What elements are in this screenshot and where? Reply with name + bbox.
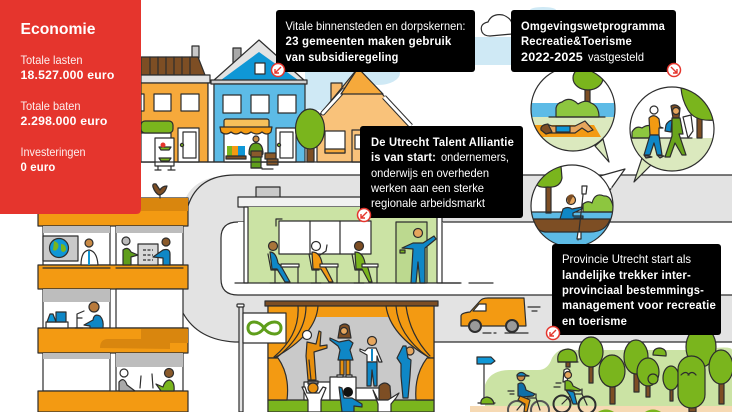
- stat: totale baten: Totale baten: [20, 99, 80, 113]
- callout: vitale binnensteden: van subsidieregeling: [286, 50, 398, 64]
- bird: [153, 184, 167, 198]
- whiteboard: [276, 219, 371, 254]
- callout: omgevingswetprogramma: Recreatie&Toerisme: [521, 34, 632, 48]
- door: [396, 222, 427, 283]
- cyclist 1: [508, 372, 549, 412]
- callout: utrecht talent alliantie: onderwijs en overheden: [371, 166, 489, 180]
- icon: arrow badge omgevingswet: [668, 64, 680, 76]
- performer man with tie: [360, 336, 382, 386]
- callout: vitale binnensteden: 23 gemeenten maken gebruik: [286, 34, 452, 48]
- speech bubble: hikers: [628, 87, 718, 182]
- office building: [38, 198, 188, 412]
- teacher: [400, 228, 436, 283]
- student 1: [268, 242, 299, 283]
- audience: [302, 383, 399, 412]
- callout: omgevingswetprogramma: vastgesteld: [588, 50, 644, 64]
- student 3: [352, 242, 378, 283]
- delivery van: [461, 298, 540, 333]
- globe screen: [43, 236, 78, 261]
- callout: utrecht talent alliantie: [360, 126, 523, 218]
- curtain puller: [397, 346, 414, 398]
- tree by house: [296, 109, 324, 162]
- podium: [304, 377, 382, 400]
- performer woman: [330, 324, 353, 377]
- curtains: [268, 306, 434, 400]
- classroom: [235, 187, 460, 284]
- hiker right with map: [665, 105, 693, 157]
- stat: investeringen: [20, 145, 86, 174]
- performer orange: [302, 330, 327, 384]
- road dashes: [442, 282, 493, 284]
- stat: totale lasten: 18.527.000 euro: [20, 68, 114, 82]
- icon: arrow badge vitale: [272, 64, 284, 76]
- icon: arrow badge talent alliantie: [358, 208, 370, 222]
- callout: omgevingswetprogramma: 2022-2025: [521, 50, 583, 64]
- callout: vitale binnensteden: Vitale binnensteden en dorpskernen:: [286, 19, 466, 33]
- panel: economie: [0, 0, 141, 214]
- signpost: [477, 357, 495, 404]
- rower: [560, 186, 587, 240]
- speech bubble: beach: [530, 66, 620, 162]
- presenter: [81, 239, 98, 265]
- stat: investeringen: 0 euro: [20, 160, 56, 174]
- speech bubble: canoe: [530, 165, 625, 248]
- hiker left: [644, 106, 664, 158]
- icon: arrow badge provincie: [546, 326, 560, 340]
- houses row: [141, 40, 411, 170]
- signboard: [155, 138, 175, 170]
- callout: provincie utrecht: en toerisme: [562, 314, 627, 328]
- two people in meeting: [119, 368, 174, 391]
- theatre stage: [265, 301, 438, 412]
- callout: provincie utrecht: [552, 244, 721, 335]
- callout: omgevingswetprogramma: [511, 10, 676, 72]
- stat: totale baten: 2.298.000 euro: [20, 114, 108, 128]
- lab scientist: [46, 302, 103, 328]
- stat: totale lasten: Totale lasten: [20, 53, 82, 67]
- house: orange: [141, 46, 214, 162]
- callout: utrecht talent alliantie: is van start:: [371, 150, 436, 164]
- flag with infinity logo: [237, 304, 286, 412]
- callout: provincie utrecht: Provincie Utrecht start als: [562, 252, 691, 266]
- callout: utrecht talent alliantie: regionale arbeidsmarkt: [371, 196, 486, 210]
- callout: provincie utrecht: provinciaal bestemmings-: [562, 283, 704, 297]
- stat: totale baten: [20, 99, 108, 128]
- house: blue: [211, 40, 307, 162]
- stat: totale lasten: [20, 53, 114, 82]
- shopkeeper with crate: [249, 136, 278, 169]
- road: [183, 175, 732, 342]
- house: peach: [317, 68, 411, 162]
- callout: utrecht talent alliantie: De Utrecht Talent Alliantie: [371, 135, 514, 149]
- callout: utrecht talent alliantie: werken aan een sterke: [370, 181, 484, 195]
- trees: [558, 327, 732, 412]
- callout: utrecht talent alliantie: ondernemers,: [441, 150, 509, 164]
- sky and cloud: [305, 7, 556, 110]
- student 2: [309, 242, 338, 283]
- callout: omgevingswetprogramma: Omgevingswetprogramma: [521, 19, 665, 33]
- callout: provincie utrecht: management voor recreatie: [562, 298, 716, 312]
- two colleagues at board: [122, 237, 170, 265]
- cyclist 2: [554, 369, 596, 412]
- callout: vitale binnensteden: [276, 10, 475, 72]
- stat: investeringen: Investeringen: [20, 145, 86, 159]
- park with trees and cyclists: [470, 327, 732, 412]
- heading: Economie: [20, 21, 96, 38]
- callout: provincie utrecht: landelijke trekker inter-: [562, 268, 691, 282]
